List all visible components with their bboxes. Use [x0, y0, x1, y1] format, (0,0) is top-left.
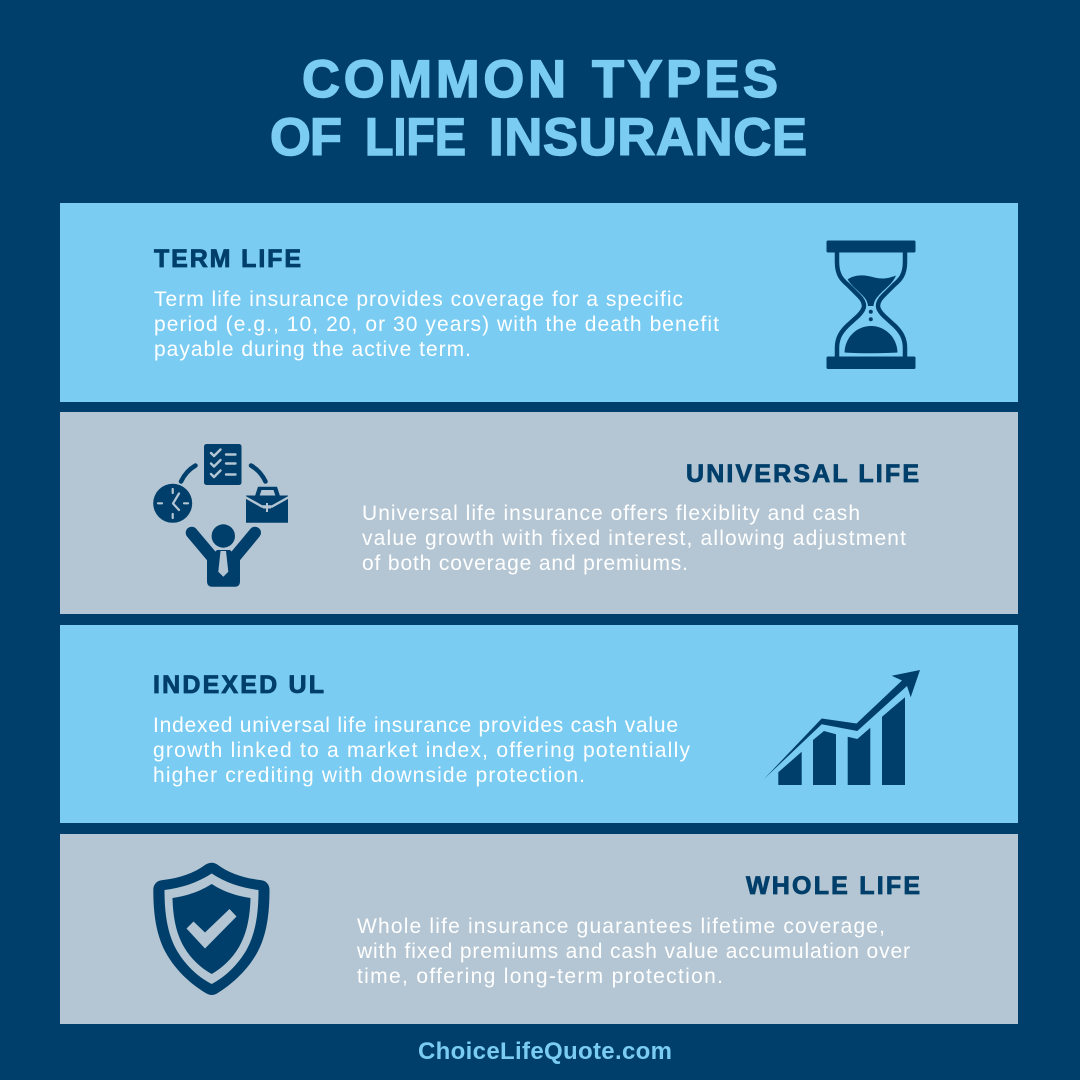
- text block: term life description: payable during the active term.: [154, 338, 471, 361]
- text block: term life description: Term life insurance provides coverage for a specific: [154, 288, 683, 311]
- text block: term life description: [154, 288, 719, 361]
- title: TYPES: [592, 50, 778, 109]
- text block: universal life description: value growth with fixed interest, allowing adjustment: [362, 527, 906, 550]
- text block: universal life description: [362, 502, 906, 575]
- panel: indexed UL: [60, 625, 1018, 823]
- text block: indexed UL description: higher crediting with downside protection.: [153, 764, 585, 787]
- panel: term life: [60, 203, 1018, 402]
- text block: indexed UL description: Indexed universal life insurance provides cash value: [153, 714, 678, 737]
- footer: website: ChoiceLifeQuote.com: [418, 1038, 672, 1065]
- text block: whole life description: [356, 915, 910, 988]
- title: OF: [270, 108, 342, 167]
- text block: indexed UL description: [153, 714, 691, 787]
- title: [270, 50, 807, 167]
- icon: shield with check mark: [153, 863, 270, 995]
- title: COMMON: [302, 50, 566, 109]
- heading: term life: TERM LIFE: [154, 245, 301, 273]
- text block: universal life description: Universal life insurance offers flexiblity and cash: [362, 502, 860, 525]
- text block: whole life description: time, offering long-term protection.: [357, 965, 723, 988]
- title: LIFE: [365, 108, 466, 167]
- heading: universal life: UNIVERSAL LIFE: [686, 460, 919, 488]
- text block: universal life description: of both coverage and premiums.: [362, 552, 688, 575]
- icon: rising bar chart with arrow: [764, 670, 920, 785]
- heading: indexed UL: INDEXED UL: [153, 671, 324, 699]
- icon: person with tasks, clock and briefcase: [153, 444, 289, 587]
- panel: universal life: [60, 412, 1018, 614]
- text block: term life description: period (e.g., 10, 20, or 30 years) with the death benefit: [154, 313, 719, 336]
- text block: whole life description: Whole life insurance guarantees lifetime coverage,: [357, 915, 885, 938]
- icon: hourglass: [826, 240, 916, 369]
- heading: whole life: WHOLE LIFE: [746, 872, 920, 900]
- title: INSURANCE: [489, 108, 807, 167]
- text block: whole life description: with fixed premiums and cash value accumulation over: [356, 940, 910, 963]
- text block: indexed UL description: growth linked to a market index, offering potentially: [153, 739, 691, 762]
- panel: whole life: [60, 834, 1018, 1024]
